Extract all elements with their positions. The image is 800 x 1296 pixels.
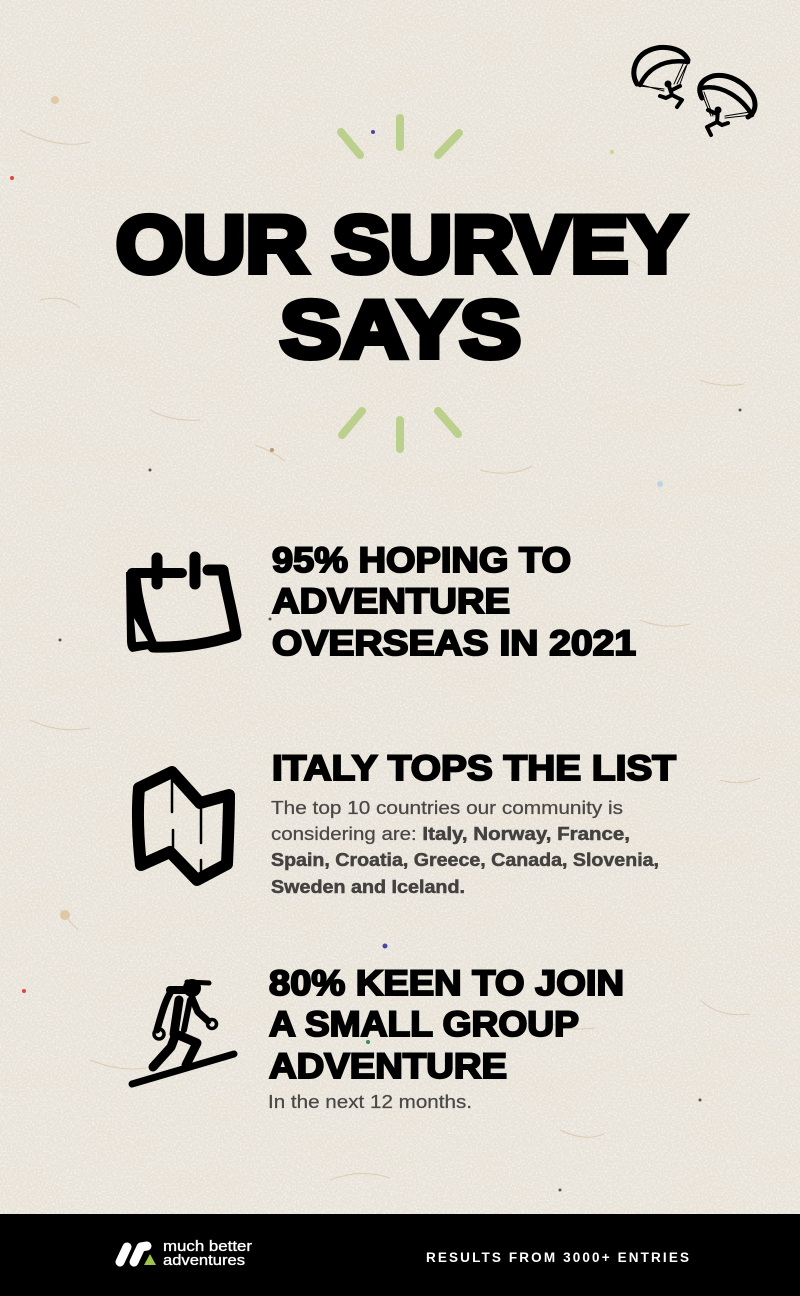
text: top 10 countries: Sweden and Iceland. xyxy=(271,876,465,897)
text: top 10 countries xyxy=(271,797,659,897)
heading: 95% hoping: OVERSEAS IN 2021 xyxy=(272,624,636,663)
sunburst top xyxy=(341,118,459,155)
title: OUR SURVEY xyxy=(116,200,686,290)
heading: 80% keen: ADVENTURE xyxy=(269,1047,507,1086)
logo: much better adventures xyxy=(120,1238,252,1269)
title: SAYS xyxy=(280,285,521,375)
icon: calendar xyxy=(126,557,236,652)
heading: 95% hoping: 95% HOPING TO xyxy=(272,541,571,580)
footer bar xyxy=(0,1214,800,1296)
heading: Italy tops the list: ITALY TOPS THE LIST xyxy=(272,749,676,788)
icon: map xyxy=(138,772,229,880)
text: next 12 months: In the next 12 months. xyxy=(268,1091,472,1112)
title xyxy=(116,200,686,375)
heading: 80% keen: 80% KEEN TO JOIN xyxy=(269,964,624,1003)
icon: two parachutists xyxy=(634,47,755,135)
text: top 10 countries: Spain, Croatia, Greece, Canada, Slovenia, xyxy=(271,849,659,870)
icon: parachutist right xyxy=(700,75,755,135)
text: top 10 countries: The top 10 countries our community is xyxy=(271,797,623,818)
heading: 95% hoping xyxy=(272,541,636,663)
footer text: RESULTS FROM 3000+ ENTRIES xyxy=(426,1250,689,1265)
sunburst bottom xyxy=(342,411,458,449)
logo: much better adventures: much better xyxy=(163,1238,252,1255)
icon: hiker on slope xyxy=(132,979,234,1084)
text: top 10 countries: considering are: Italy, Norway, France, xyxy=(271,823,630,844)
heading: 80% keen xyxy=(269,964,624,1086)
icon: parachutist left xyxy=(634,47,688,107)
logo: much better adventures: adventures xyxy=(163,1252,245,1269)
heading: 80% keen: A SMALL GROUP xyxy=(269,1005,579,1044)
heading: 95% hoping: ADVENTURE xyxy=(272,582,510,621)
